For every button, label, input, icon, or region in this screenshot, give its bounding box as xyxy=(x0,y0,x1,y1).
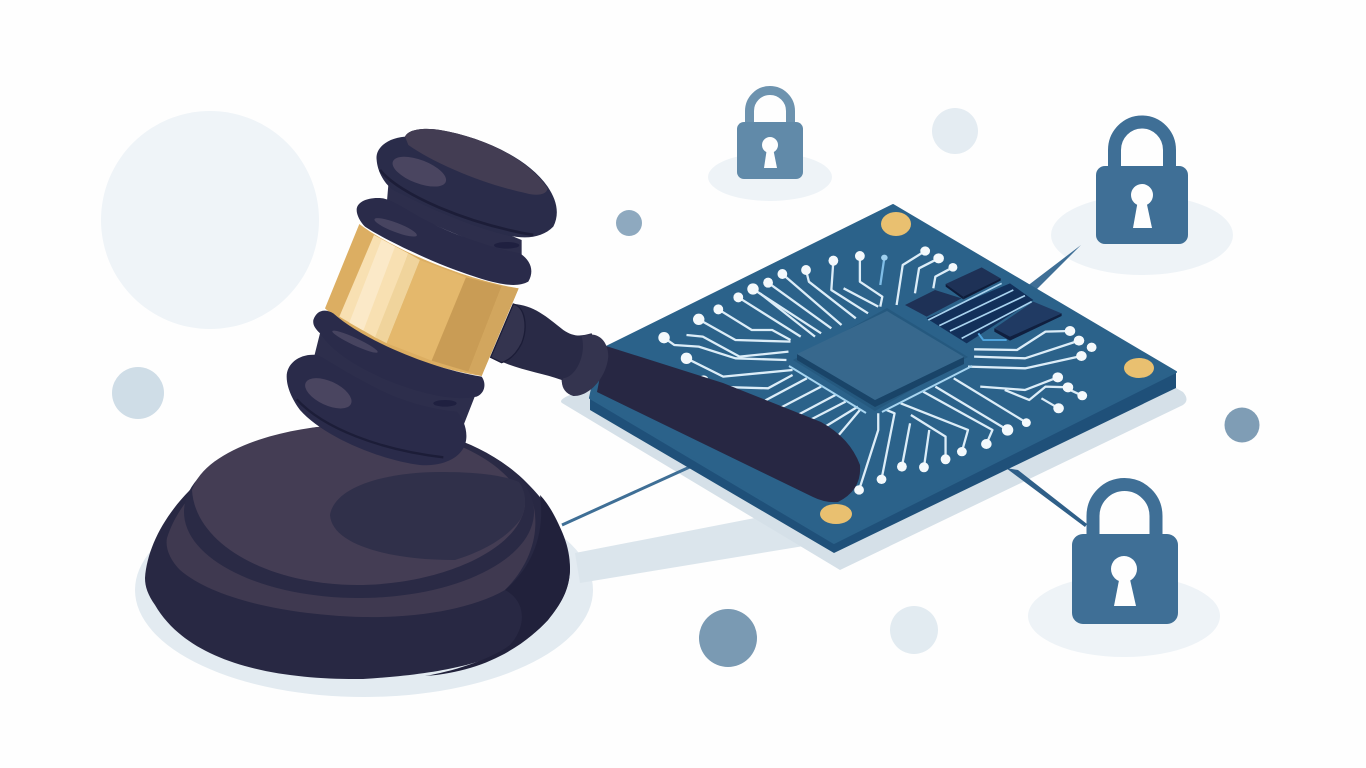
third ring xyxy=(313,311,484,398)
second ring xyxy=(357,198,531,285)
base top plate xyxy=(192,425,525,585)
gavel base xyxy=(145,424,570,679)
gavel base shadow xyxy=(135,483,593,697)
upper neck xyxy=(387,185,522,262)
small components, upper right xyxy=(905,267,1062,343)
connector lines xyxy=(562,245,1087,527)
board side thickness xyxy=(590,372,1176,553)
gavel head and handle neck, in zoom coordinates xyxy=(287,129,608,465)
gold band xyxy=(325,224,519,376)
central processor chip xyxy=(789,308,972,413)
circuit board shadow xyxy=(561,230,1186,570)
base groove xyxy=(184,426,534,598)
circuit traces, in zoom coordinates xyxy=(658,246,1097,495)
padlock: upper right xyxy=(1051,122,1233,275)
base outer block xyxy=(145,424,570,679)
lower neck xyxy=(310,333,480,430)
cast shadow from base to board xyxy=(575,517,810,583)
handle neck xyxy=(491,304,608,396)
top cap xyxy=(376,129,557,237)
circuit board xyxy=(590,205,1176,553)
board top surface xyxy=(590,205,1176,543)
corner pads xyxy=(820,212,1154,524)
base shadow patch xyxy=(330,472,525,560)
base lighter ring xyxy=(167,425,535,617)
gavel handle shaft xyxy=(597,346,860,502)
base right dark patch xyxy=(425,495,570,676)
padlock: lower right xyxy=(1028,484,1220,657)
padlock: small top xyxy=(708,90,832,201)
decorative background circles xyxy=(101,108,1260,667)
trace end pads xyxy=(658,246,1097,495)
bottom cap xyxy=(287,355,466,465)
